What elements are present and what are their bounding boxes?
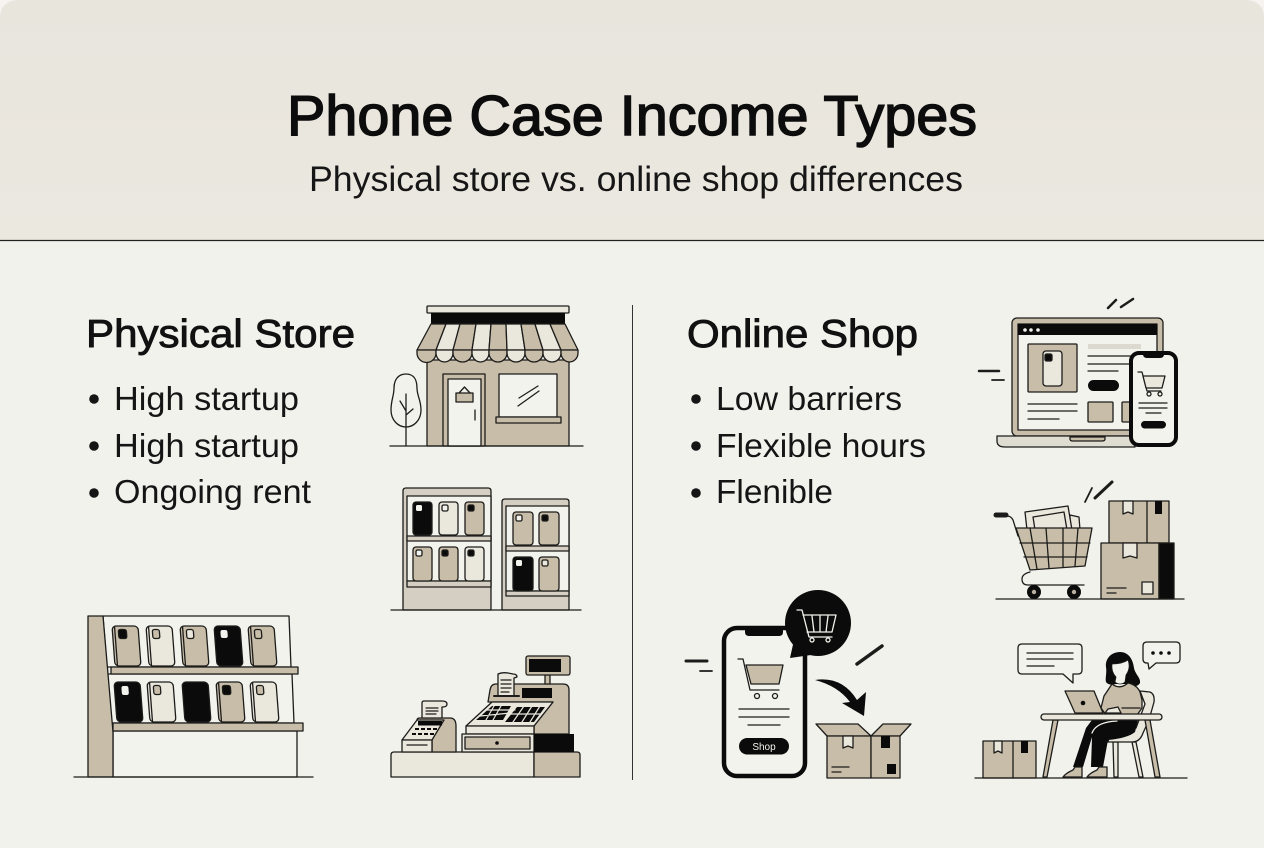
- torso: [1101, 683, 1142, 715]
- open box: [816, 724, 911, 778]
- right unit cases: [513, 512, 533, 545]
- shoes: [1063, 767, 1082, 777]
- laptop: [1065, 691, 1103, 713]
- heading: online shop: Online Shop: [687, 313, 918, 356]
- icon: phone case shelves: [391, 488, 581, 610]
- panel: online shop text: [687, 313, 926, 510]
- main register: [488, 684, 569, 734]
- shop button: Shop: [752, 742, 776, 753]
- box: [983, 741, 1036, 778]
- icon: cash registers on counter: [391, 656, 580, 777]
- header band: [0, 0, 1264, 240]
- icon: shopping cart and boxes: [996, 482, 1184, 599]
- speech bubble large: [1018, 644, 1082, 683]
- small register: [417, 718, 456, 752]
- icon: laptop and phone storefront: [979, 299, 1176, 447]
- bullet list: online shop: Flenible: [716, 473, 833, 510]
- legs: [1073, 720, 1138, 767]
- bullet list: physical store: High startup: [114, 427, 299, 464]
- bullet list: online shop: Flexible hours: [716, 427, 926, 464]
- icon: tilted phone case display rack: [74, 616, 313, 777]
- bullet list: physical store: High startup: [114, 380, 299, 417]
- bullet list: online shop: [691, 380, 926, 510]
- title: Phone Case Income Types: [287, 84, 977, 148]
- bullet list: online shop: Low barriers: [716, 380, 902, 417]
- subtitle: Physical store vs. online shop differences: [309, 160, 963, 199]
- bottom row cases: [114, 682, 143, 722]
- icon: mobile shopping phone with arrow and box: [686, 590, 911, 778]
- icon: storefront: [390, 306, 583, 446]
- heading: physical store: Physical Store: [86, 313, 355, 356]
- arrow to box: [815, 679, 866, 716]
- cart speech bubble: [785, 590, 851, 658]
- icon: woman at laptop with chat bubbles: [975, 642, 1187, 778]
- desk legs: [1043, 720, 1058, 777]
- top row cases: [112, 626, 141, 666]
- left unit cases: [413, 502, 432, 535]
- speech bubble small: [1143, 642, 1180, 669]
- desk top: [1041, 714, 1162, 720]
- motion lines: [979, 299, 1133, 380]
- bullet list: physical store: [89, 380, 311, 510]
- bullet list: physical store: Ongoing rent: [114, 473, 311, 510]
- shop button: [739, 738, 789, 754]
- face and neck: [1112, 660, 1129, 684]
- hair: [1106, 652, 1140, 686]
- chair: [1108, 691, 1154, 777]
- panel: physical store text: [86, 313, 355, 510]
